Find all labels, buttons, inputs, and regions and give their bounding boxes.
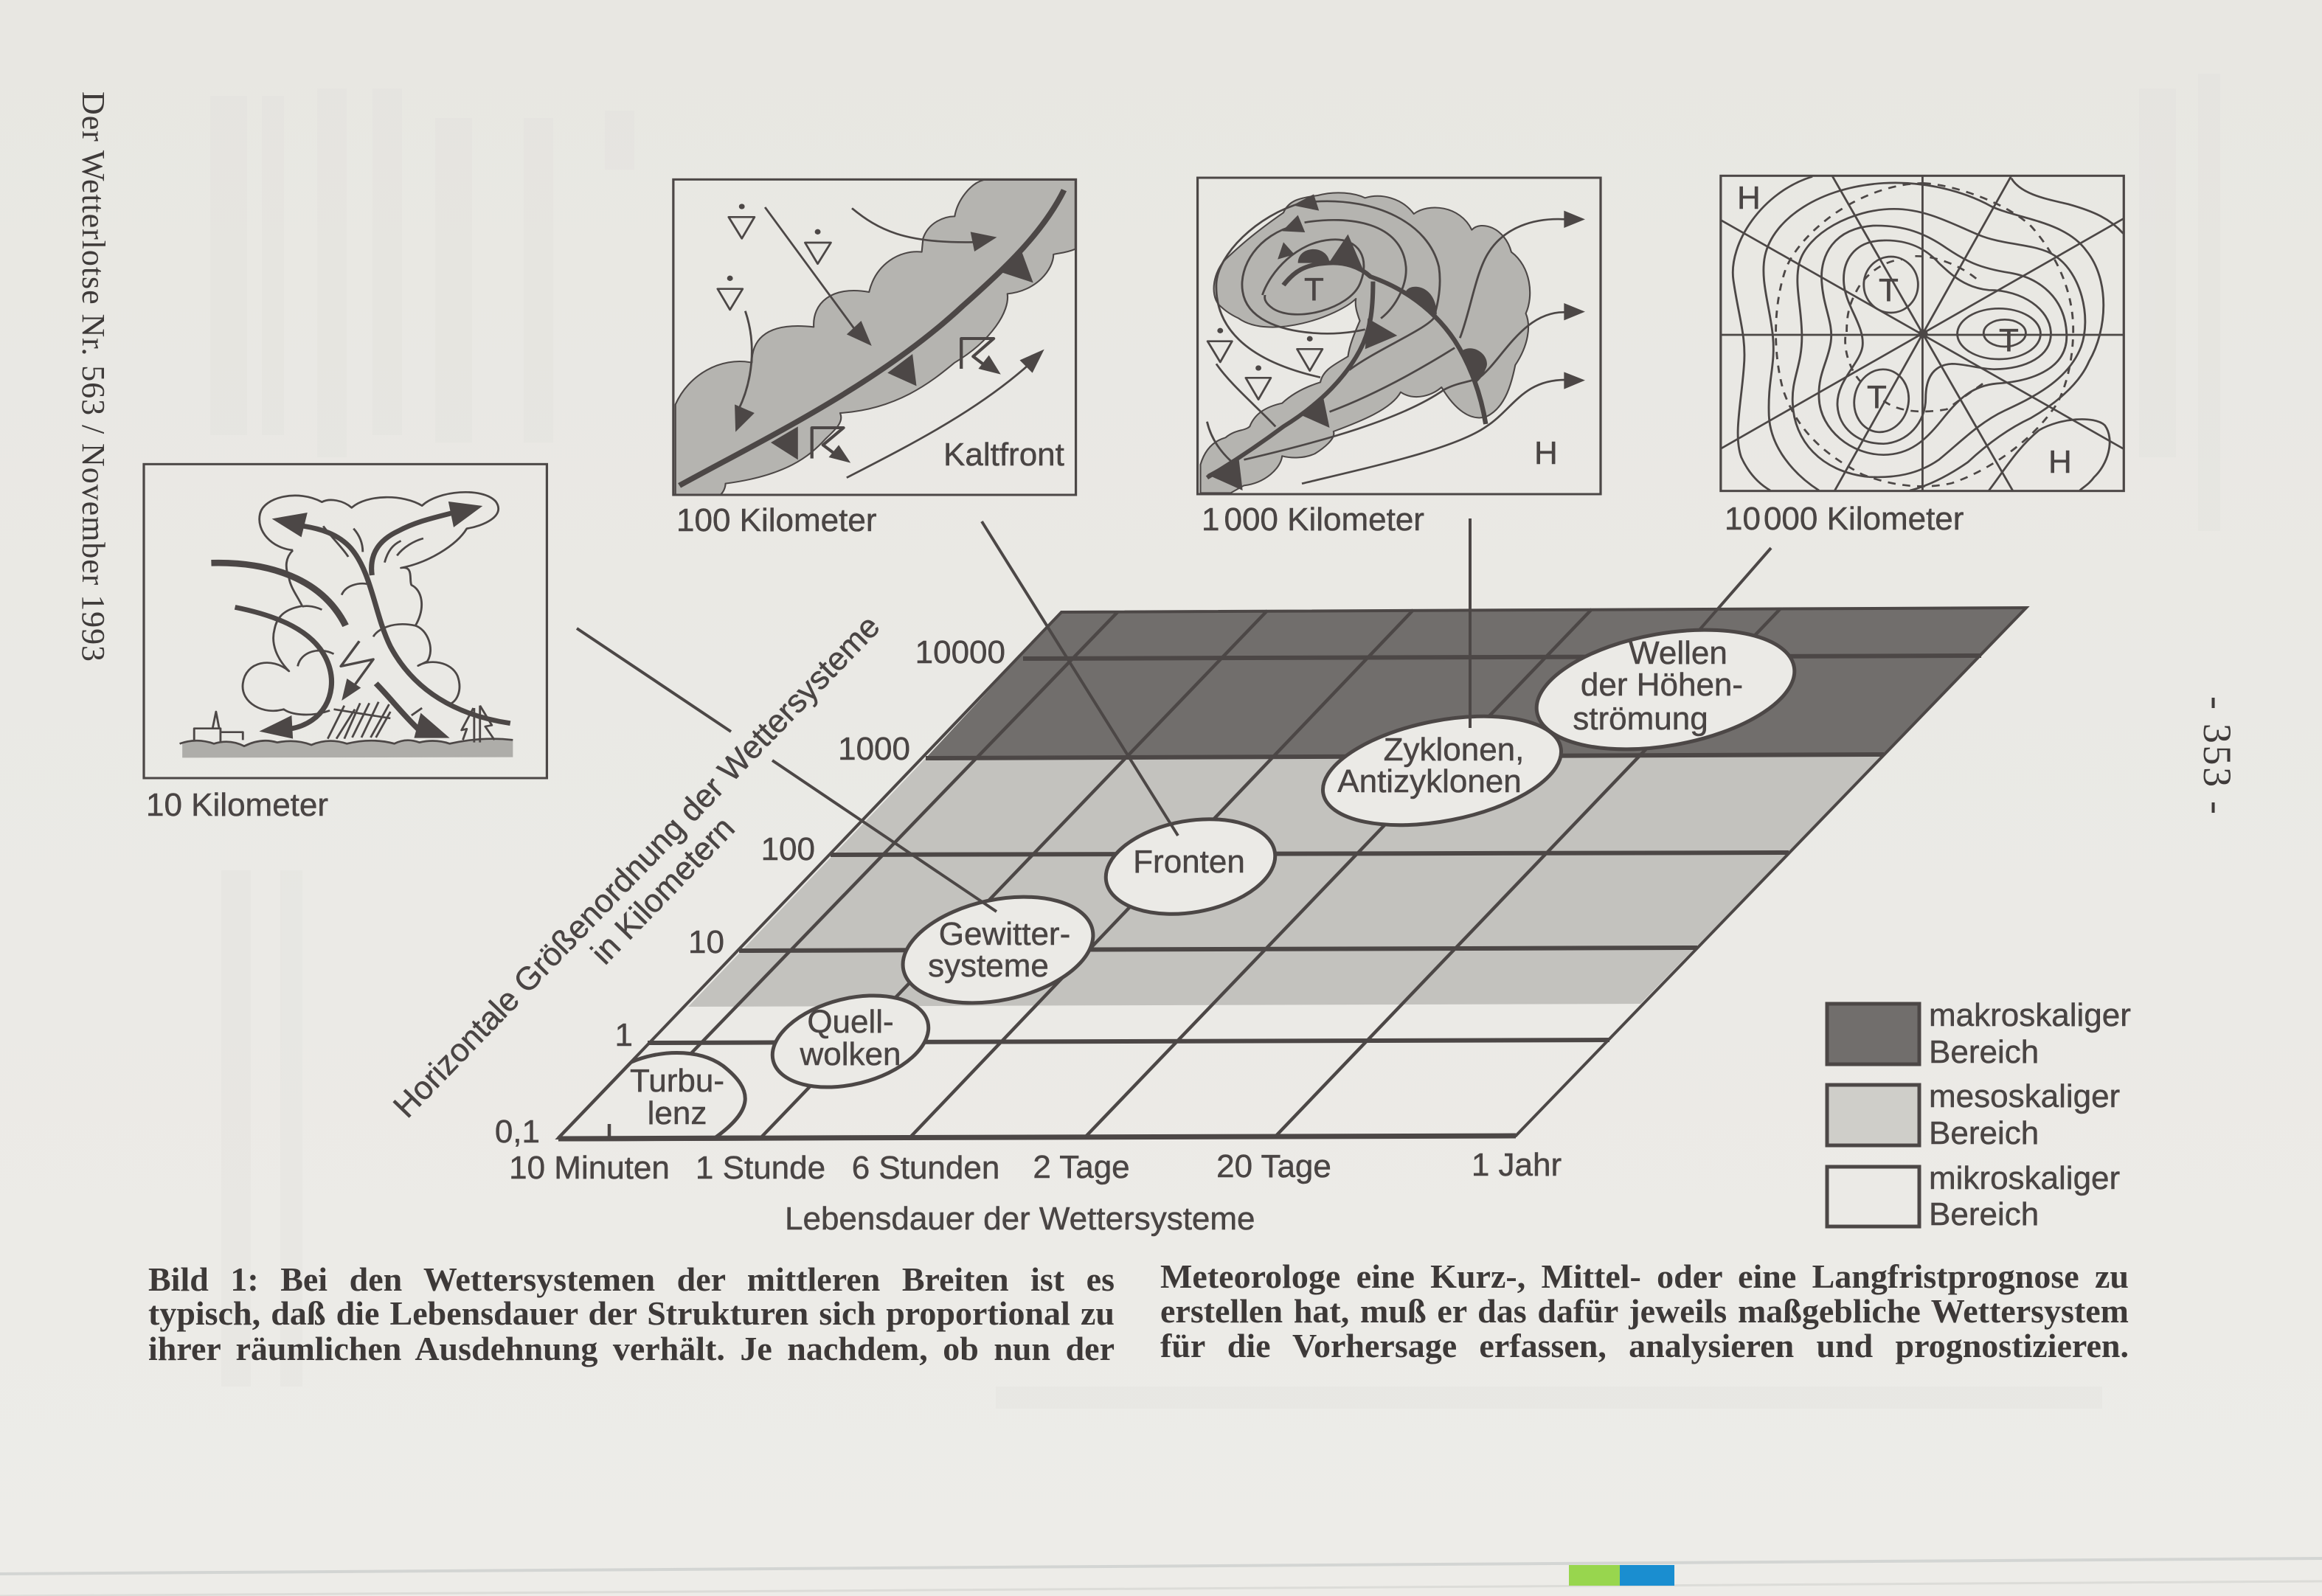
macro-scale band	[926, 608, 2026, 758]
pressure labels: H	[1737, 180, 1761, 216]
y axis values: 100	[761, 831, 815, 867]
x axis values: 20 Tage	[1216, 1148, 1331, 1184]
pressure labels: H	[2048, 444, 2072, 480]
caption left column: Bild 1: Bei den Wettersystemen der mittleren Breiten ist es	[148, 1260, 1115, 1298]
pressure labels	[1304, 271, 1558, 471]
rain hatch	[327, 702, 390, 739]
cold front	[1207, 282, 1373, 478]
legend	[1827, 997, 2131, 1232]
ellipse: Zyklonen: Zyklonen,	[1384, 732, 1524, 768]
ellipse: Quellwolken	[763, 981, 938, 1102]
caption right column: Meteorologe eine Kurz-, Mittel- oder eine Langfristprognose zu	[1160, 1257, 2129, 1295]
y axis values: 10000	[915, 634, 1005, 670]
panel: 100 Kilometer cold front	[673, 179, 1076, 538]
shower symbols	[1207, 341, 1323, 400]
caption left column	[148, 1260, 1115, 1367]
panel caption: 10 Kilometer	[146, 787, 328, 823]
isobars	[1733, 176, 2124, 490]
airflow arrows	[211, 563, 346, 625]
thunderstorm symbols	[961, 339, 994, 369]
caption right column: erstellen hat, muß er das dafür jeweils maßgebliche Wettersystem	[1160, 1292, 2129, 1330]
wind arrows	[765, 207, 861, 338]
pressure labels	[1737, 180, 2072, 480]
x axis values: 1 Jahr	[1472, 1147, 1562, 1183]
pressure labels: T	[1867, 379, 1887, 415]
ellipse: Quellwolken: wolken	[800, 1036, 901, 1072]
ellipse: Turbulenz	[558, 1053, 760, 1139]
shower symbols	[718, 217, 831, 310]
lightning	[341, 641, 373, 686]
legend: meso: Bereich	[1929, 1115, 2039, 1151]
pressure labels: T	[1879, 272, 1899, 308]
colour bar: green	[1569, 1565, 1620, 1586]
x axis values	[509, 1147, 1562, 1186]
ellipse: Gewittersysteme: Gewitter-	[939, 916, 1070, 952]
faint show-through from the reverse page	[210, 74, 2220, 1409]
panel caption: 1000 Kilometer	[1202, 502, 1424, 538]
legend: meso: mesoskaliger	[1929, 1078, 2120, 1114]
dashed troughs	[1776, 183, 2073, 486]
ellipse: Zyklonen: Antizyklonen	[1337, 763, 1522, 799]
church	[194, 712, 243, 741]
ellipse: Wellen der Hoehenstroemung: der Höhen-	[1581, 667, 1743, 703]
caption left column: ihrer räumlichen Ausdehnung verhält. Je nachdem, ob nun der	[148, 1330, 1115, 1367]
panel caption: 100 Kilometer	[676, 502, 876, 538]
panel: 1000 Kilometer cyclone	[1198, 178, 1601, 538]
meridians and parallel	[1721, 176, 2124, 490]
legend: micro: mikroskaliger	[1929, 1160, 2120, 1196]
pressure labels: H	[1534, 435, 1558, 471]
cloud outline	[243, 492, 499, 715]
isobars and flow	[1460, 219, 1565, 338]
connector lines from panels to ellipses	[577, 518, 1771, 912]
ellipse: Gewittersysteme: systeme	[928, 948, 1049, 984]
y axis values: 10	[688, 924, 724, 960]
y axis title: Horizontale Größenordnung der Wettersysteme	[387, 608, 887, 1125]
legend: macro: makroskaliger	[1929, 997, 2131, 1033]
page bottom edge lines	[0, 1558, 2322, 1596]
running header: publication: Der Wetterlotse Nr. 563 / November 1993	[75, 91, 111, 662]
caption left column: typisch, daß die Lebensdauer der Strukturen sich proportional zu	[148, 1294, 1115, 1332]
panel caption: 10000 Kilometer	[1725, 501, 1964, 537]
caption right column	[1160, 1257, 2129, 1364]
y axis values: 0,1	[495, 1114, 540, 1150]
warm front	[1283, 263, 1486, 424]
panel: 10000 Kilometer pressure map	[1721, 176, 2124, 537]
legend: micro: Bereich	[1929, 1196, 2039, 1232]
x axis title: Lebensdauer der Wettersysteme	[785, 1201, 1255, 1237]
y axis values: 1	[615, 1017, 633, 1053]
trees	[462, 706, 494, 743]
colour bar: blue	[1620, 1565, 1674, 1586]
pressure labels: T	[1999, 322, 2019, 358]
caption right column: für die Vorhersage erfassen, analysieren und prognostizieren.	[1160, 1327, 2129, 1364]
x axis values: 1 Stunde	[696, 1150, 825, 1186]
ellipse: Zyklonen	[1314, 698, 1570, 843]
spiral arrowheads	[1292, 194, 1319, 211]
ellipse: Turbulenz: lenz	[648, 1095, 707, 1131]
meso-scale band	[688, 754, 1884, 1007]
legend: macro	[1827, 997, 2131, 1070]
ellipse: Fronten: Fronten	[1133, 844, 1245, 880]
ellipse: Turbulenz: Turbu-	[630, 1063, 724, 1099]
legend: macro: Bereich	[1929, 1034, 2039, 1070]
grid lines	[558, 608, 2026, 1139]
ellipse: Wellen der Hoehenstroemung: Wellen	[1629, 635, 1727, 671]
panel: 10 Kilometer thunderstorm	[144, 464, 547, 823]
cloud spiral	[1200, 192, 1530, 493]
ellipse: Quellwolken: Quell-	[807, 1004, 894, 1040]
panel label: Kaltfront: Kaltfront	[943, 437, 1064, 473]
pressure labels: T	[1304, 271, 1324, 308]
y axis values	[495, 634, 1005, 1150]
chart: scale-lifetime grid	[387, 518, 2026, 1237]
front line	[679, 190, 1064, 485]
legend: micro	[1827, 1160, 2120, 1232]
x axis values: 10 Minuten	[509, 1150, 670, 1186]
ellipse: Gewittersysteme	[893, 881, 1103, 1019]
legend: meso	[1827, 1078, 2120, 1151]
page number: - 353 -	[2195, 696, 2239, 814]
x axis values: 6 Stunden	[852, 1150, 999, 1186]
ellipse: Wellen der Hoehenstroemung	[1527, 611, 1804, 768]
y axis values: 1000	[838, 731, 910, 767]
cloud band	[676, 180, 1075, 495]
ground	[182, 739, 513, 757]
x axis values: 2 Tage	[1033, 1149, 1130, 1185]
ellipse: Fronten	[1098, 807, 1283, 926]
y axis title: in Kilometern	[584, 810, 742, 971]
ellipse: Wellen der Hoehenstroemung: strömung	[1573, 701, 1708, 737]
